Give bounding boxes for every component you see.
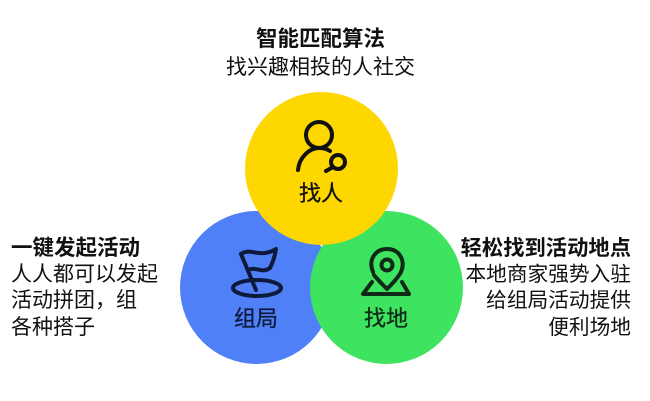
- panel: right text: [461, 236, 631, 338]
- heading: easy venue: 轻松找到活动地点: [461, 236, 631, 260]
- icon: map pin: [363, 249, 409, 294]
- text: right description: [465, 262, 631, 338]
- text: right description: 本地商家强势入驻: [465, 262, 631, 286]
- text: left description: 各种搭子: [11, 316, 95, 338]
- text: matching description: 找兴趣相投的人社交: [226, 56, 415, 79]
- panel: left text: [11, 236, 158, 338]
- circle: yellow: [245, 92, 398, 245]
- text: left description: 活动拼团，组: [11, 289, 137, 312]
- label: find venue: 找地: [364, 306, 408, 331]
- text: right description: 给组局活动提供: [486, 289, 631, 312]
- text: left description: 人人都可以发起: [11, 262, 158, 286]
- text: right description: 便利场地: [548, 316, 631, 338]
- label: organise group: 组局: [234, 306, 278, 331]
- circle: green: [310, 211, 463, 364]
- circle: blue: [180, 211, 333, 364]
- text: left description: [11, 262, 158, 338]
- heading: start activity: 一键发起活动: [11, 236, 140, 260]
- icon: person search: [298, 122, 345, 171]
- label: find people: 找人: [299, 181, 343, 206]
- heading: matching algorithm: 智能匹配算法: [256, 27, 385, 51]
- icon: flag: [233, 249, 281, 296]
